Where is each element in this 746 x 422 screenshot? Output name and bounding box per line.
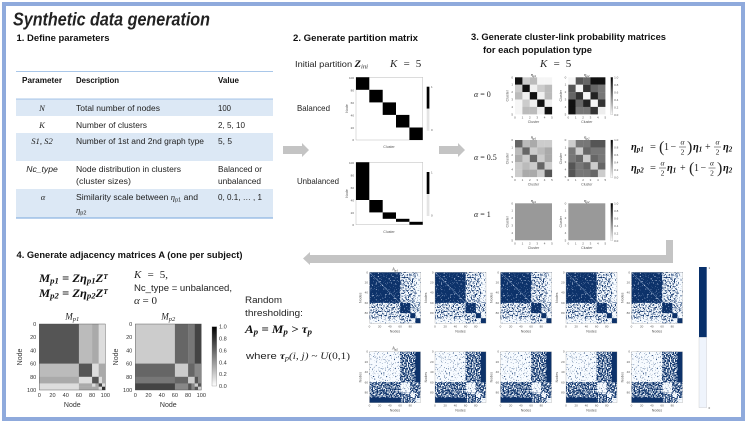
heatmap: M p2: 80: [126, 375, 132, 381]
colorbar: balanced: 0: [431, 128, 433, 132]
parameter table: Value: [218, 75, 239, 85]
equations: eta mixing: η: [667, 163, 673, 174]
text: random thresholding: thresholding:: [245, 308, 303, 319]
parameter table: Description: [76, 75, 119, 85]
colorbar: M matrices: 0.8: [219, 337, 227, 343]
text: random thresholding: p: [284, 354, 290, 362]
matrix: balanced: Node: [345, 104, 349, 113]
colorbar: M matrices: 0.2: [219, 372, 227, 378]
parameter table: Total number of nodes: [76, 103, 160, 113]
matrix: A p1 subject 4: [555, 270, 617, 333]
parameter table: and: [181, 192, 198, 202]
equations: M matrices: p2: [49, 292, 59, 300]
equations: eta mixing: p1: [636, 146, 644, 154]
matrix: eta p2, alpha 0: p2: [585, 74, 590, 78]
heatmap: M p2: [113, 312, 206, 409]
matrix: balanced: 20: [351, 126, 354, 130]
matrix: unbalanced: [345, 161, 423, 234]
matrix: unbalanced: Cluster: [383, 230, 395, 234]
equations: eta mixing: α: [681, 138, 686, 146]
equations: eta mixing: 2: [661, 168, 665, 178]
colorbar: adjacency: 1: [708, 266, 710, 270]
equations: eta mixing: 1: [694, 163, 699, 174]
equations: M matrices: = Zη: [59, 273, 87, 285]
heatmap: M p2: Node: [160, 402, 177, 409]
matrix: A p2 subject 4: Nodes: [555, 372, 559, 382]
text: random thresholding: Random: [245, 295, 282, 306]
label: alpha 0.5: α = 0.5: [474, 153, 497, 162]
matrix: balanced: 40: [351, 114, 354, 118]
panel: partition matrix: [293, 33, 433, 234]
equations: eta mixing: 1: [673, 166, 676, 174]
matrix: A p1 subject 3: Nodes: [490, 292, 494, 303]
matrix: unbalanced: Node: [345, 189, 349, 198]
heatmap: M p1: Node: [64, 402, 81, 409]
matrix: A p2 subject 3: Nodes: [490, 372, 494, 382]
equations: eta mixing: =: [650, 163, 656, 174]
heatmap: M p1: 60: [30, 362, 36, 368]
panel: define parameters: [16, 33, 273, 218]
matrix: A p2 subject 3: Nodes: [521, 409, 531, 413]
heading: step 3: for each population type: [483, 45, 592, 56]
parameter table: Similarity scale between η: [76, 192, 175, 202]
heatmap: M p2: 0: [129, 322, 132, 328]
matrix: A p1 subject 2: [424, 270, 486, 333]
parameter table: 0, 0.1, … , 1: [218, 192, 262, 202]
matrix: unbalanced: 40: [351, 198, 354, 202]
colorbar: adjacency: [699, 266, 710, 410]
heatmap: M p1: M: [65, 312, 73, 322]
heatmap: M p1: [17, 312, 110, 409]
equations: eta mixing: 2: [710, 168, 714, 178]
matrix: A p1 subject 2: Nodes: [424, 292, 428, 303]
heading: step 1: 1. Define parameters: [16, 33, 110, 44]
parameter table: p2: [80, 210, 86, 216]
matrix: unbalanced: 80: [351, 174, 354, 178]
text: random thresholding: (0,1): [328, 351, 350, 362]
colorbar: balanced: 1: [431, 85, 433, 89]
heatmap: M p1: 0: [38, 393, 41, 399]
equations: eta mixing: η: [723, 142, 729, 153]
heatmap: M p1: 80: [30, 375, 36, 381]
colorbar: alpha 0.5: [611, 138, 619, 180]
heatmap: M p1: 40: [30, 348, 36, 354]
heatmap: M p2: Node: [113, 349, 120, 365]
equations: eta mixing: =: [650, 142, 656, 153]
matrix: A p1 subject 4: Nodes: [555, 292, 559, 303]
panel: cluster-link probability matrices: [471, 32, 733, 250]
equations: M matrices: p1: [86, 276, 96, 286]
equations: eta mixing: α: [710, 158, 715, 168]
parameters text: Nc_type = unbalanced,: [134, 283, 232, 294]
matrix: A p2 subject 1: p2: [394, 348, 398, 352]
equations: eta mixing: 2: [728, 166, 733, 174]
parameters text: α = 0: [134, 295, 157, 307]
equations: eta mixing: (: [689, 160, 694, 177]
matrix: balanced: Cluster: [383, 145, 395, 149]
heatmap: M p2: 40: [159, 393, 165, 399]
parameter table: [16, 72, 273, 218]
heatmap: M p2: 100: [197, 393, 206, 399]
heatmap: M p2: 40: [126, 348, 132, 354]
parameter table: Node distribution in clusters: [76, 164, 181, 174]
equations: eta mixing: (: [659, 139, 664, 156]
parameter table: Parameter: [22, 75, 63, 85]
equations: eta mixing: η: [631, 142, 637, 153]
equations: M matrices: p2: [86, 292, 96, 300]
matrix: eta p2, alpha 0.5: η: [584, 134, 586, 140]
equations: eta mixing: +: [705, 142, 711, 153]
matrix: eta p1, alpha 0: [506, 72, 553, 124]
matrix: A p1 subject 1: Nodes: [358, 292, 362, 303]
colorbar: M matrices: 0.0: [219, 384, 227, 390]
matrix: eta p2, alpha 0.5: [559, 134, 606, 186]
parameter table: Number of 1st and 2nd graph type: [76, 136, 204, 146]
matrix: A p1 subject 1: p1: [394, 268, 398, 272]
equations: M matrices: = Zη: [59, 288, 87, 300]
label: K equals 5: K = 5: [539, 58, 572, 70]
heatmap: M p2: 60: [172, 393, 178, 399]
colorbar: unbalanced: 0: [431, 214, 433, 218]
matrix: A p2 subject 1: Nodes: [358, 372, 362, 382]
label: unbalanced: Unbalanced: [297, 177, 339, 186]
equations: eta mixing: p2: [636, 166, 644, 174]
parameter table: (cluster sizes): [76, 176, 131, 186]
parameter table: α: [41, 192, 46, 202]
matrix: A p1 subject 2: Nodes: [455, 329, 466, 333]
matrix: eta p1, alpha 1: η: [531, 198, 533, 203]
colorbar: M matrices: 1.0: [219, 325, 227, 331]
equations: eta mixing: −: [670, 142, 676, 153]
matrix: A p2 subject 3: [490, 350, 552, 413]
matrix: A p2 subject 1: Nodes: [390, 409, 400, 413]
equations: eta mixing: [631, 138, 733, 178]
equations: M matrices: Z: [95, 273, 103, 285]
matrix: balanced: [345, 76, 423, 149]
equations: eta mixing: 1: [664, 142, 669, 153]
matrix: A p2 subject 2: Nodes: [424, 372, 428, 382]
heatmap: M p2: 20: [145, 393, 152, 399]
arrow: step 3 to 4: [303, 240, 673, 265]
equations: eta mixing: +: [680, 163, 686, 174]
matrix: A p1 subject 5: Nodes: [652, 329, 662, 333]
matrix: A p2 subject 2: [424, 350, 486, 413]
label: initial partition: ini: [361, 64, 368, 70]
parameter table: 5, 5: [218, 136, 232, 146]
matrix: eta p2, alpha 1: p2: [585, 200, 590, 204]
matrix: eta p2, alpha 0.5: p2: [585, 136, 590, 140]
text: random thresholding: (i, j) ~ U: [289, 351, 330, 362]
matrix: unbalanced: 0: [352, 223, 354, 227]
colorbar: balanced: [427, 85, 433, 132]
parameter table: 100: [218, 103, 231, 113]
matrix: balanced: 0: [352, 138, 354, 142]
heatmap: M p1: 20: [30, 335, 36, 341]
matrix: eta p1, alpha 0: η: [531, 72, 533, 77]
parameters text: K = 5,: [133, 269, 168, 281]
parameter table: 2, 5, 10: [218, 120, 245, 130]
equations: eta mixing: 2: [716, 148, 720, 156]
heatmap: M p1: 40: [63, 393, 69, 399]
matrix: A p1 subject 1: Nodes: [390, 329, 400, 333]
matrix: A p1 subject 5: Nodes: [620, 292, 624, 303]
heatmap: M p1: 100: [101, 393, 110, 399]
equations: M matrices: M: [39, 273, 49, 285]
colorbar: M matrices: 0.6: [219, 348, 227, 354]
equations: eta mixing: α: [661, 158, 666, 168]
matrix: A p2 subject 1: A: [392, 346, 395, 351]
adjacency matrices: population 2: [358, 346, 682, 413]
parameter table: p1: [175, 198, 181, 204]
matrix: unbalanced: 60: [351, 186, 354, 190]
label: alpha 0: α = 0: [474, 90, 491, 99]
parameter table: Balanced or: [218, 164, 262, 174]
matrix: eta p1, alpha 1: [506, 198, 553, 250]
matrix: A p2 subject 5: Nodes: [620, 372, 624, 382]
equations: M matrices: Z: [95, 288, 103, 300]
equations: M matrices: T: [103, 273, 109, 281]
equations: eta mixing: η: [693, 142, 699, 153]
equations: eta mixing: 2: [728, 146, 733, 154]
heatmap: M p1: 60: [76, 393, 82, 399]
colorbar: alpha 0: [611, 75, 619, 117]
text: random thresholding: A: [245, 324, 253, 336]
equations: eta mixing: η: [631, 163, 637, 174]
matrix: A p1 subject 5: [620, 270, 682, 333]
matrix: eta p2, alpha 0: η: [584, 72, 586, 77]
matrix: unbalanced: 100: [349, 161, 354, 165]
heatmap: M p1: 100: [27, 388, 36, 394]
equations: M matrices: T: [103, 288, 109, 296]
matrix: unbalanced: 20: [351, 211, 354, 215]
colorbar: unbalanced: 1: [431, 170, 433, 174]
matrix: A p2 subject 5: [620, 350, 682, 413]
equations: eta mixing: η: [723, 163, 729, 174]
label: K equals 5: K = 5: [389, 58, 422, 70]
colorbar: M matrices: 0.4: [219, 360, 227, 366]
text: random thresholding: p: [282, 328, 288, 336]
matrix: A p1 subject 1: [358, 266, 420, 333]
colorbar: M matrices: [212, 325, 227, 390]
heatmap: M p1: p1: [72, 316, 79, 323]
arrow: step 1 to 2: [283, 143, 309, 157]
heatmap: M p1: 80: [89, 393, 95, 399]
heatmap: M p2: 60: [126, 362, 132, 368]
parameter table: K: [38, 120, 46, 130]
matrix: A p1 subject 3: [490, 270, 552, 333]
heading: step 3: 3. Generate cluster-link probability matrices: [471, 32, 666, 43]
parameter table: N: [38, 103, 46, 113]
matrix: eta p2, alpha 1: η: [584, 198, 586, 203]
matrix: eta p1, alpha 0.5: p1: [532, 136, 537, 140]
parameter table: η: [76, 205, 80, 215]
text: random thresholding: = M: [258, 324, 284, 336]
equations: M matrices: M: [39, 288, 49, 300]
text: random thresholding: p: [252, 328, 258, 336]
heatmap: M p2: 20: [126, 335, 132, 341]
equations: eta mixing: α: [716, 138, 721, 146]
heatmap: M p1: 20: [49, 393, 56, 399]
heading: step 2: 2. Generate partition matrix: [293, 33, 419, 44]
label: initial partition: Initial partition Z: [295, 59, 360, 70]
matrix: balanced: 80: [351, 88, 354, 92]
matrix: eta p2, alpha 0: [559, 72, 606, 124]
parameter table: Number of clusters: [76, 120, 147, 130]
text: random thresholding: where τ: [246, 351, 284, 362]
matrix: A p2 subject 4: [555, 350, 617, 413]
matrix: A p2 subject 4: Nodes: [586, 409, 597, 413]
matrix: A p1 subject 4: Nodes: [586, 329, 597, 333]
matrix: balanced: 60: [351, 101, 354, 105]
colorbar: unbalanced: [427, 170, 433, 218]
parameters text: [133, 269, 232, 307]
matrix: eta p1, alpha 1: p1: [532, 200, 537, 204]
arrow: step 2 to 3: [439, 143, 465, 157]
equations: eta mixing: ): [717, 160, 722, 177]
text: random thresholding: > τ: [288, 324, 308, 336]
matrix: A p2 subject 2: Nodes: [455, 409, 466, 413]
matrix: A p2 subject 5: Nodes: [652, 409, 662, 413]
matrix: A p1 subject 1: A: [392, 266, 395, 271]
heatmap: M p2: 80: [185, 393, 191, 399]
matrix: balanced: 100: [349, 76, 354, 80]
parameter table: Nc_type: [26, 164, 58, 174]
equations: eta mixing: 1: [699, 146, 702, 154]
heatmap: M p2: 100: [123, 388, 132, 394]
heading: step 4: 4. Generate adjacency matrices A (one per subject): [16, 250, 242, 261]
colorbar: adjacency: 0: [708, 406, 710, 410]
matrix: eta p1, alpha 0.5: η: [531, 134, 533, 140]
equations: M matrices: p1: [49, 276, 59, 286]
heatmap: M p1: Node: [17, 349, 24, 365]
matrix: eta p1, alpha 0: p1: [532, 74, 537, 78]
colorbar: alpha 1: [611, 201, 619, 243]
parameter table: S1, S2: [31, 136, 53, 146]
matrix: eta p2, alpha 1: [559, 198, 606, 250]
equations: M matrices: [38, 273, 109, 300]
equations: eta mixing: −: [700, 163, 706, 174]
heatmap: M p2: 0: [134, 393, 137, 399]
parameter table: unbalanced: [218, 176, 261, 186]
matrix: A p2 subject 1: [358, 346, 420, 413]
text: random thresholding: p: [306, 328, 312, 336]
label: alpha 1: α = 1: [474, 210, 491, 219]
matrix: A p1 subject 3: Nodes: [521, 329, 531, 333]
matrix: eta p1, alpha 0.5: [506, 134, 553, 186]
equations: eta mixing: ): [687, 139, 692, 156]
title: Synthetic data generation: [13, 8, 210, 30]
text: random thresholding: [244, 295, 350, 362]
panel: adjacency matrices: [16, 250, 710, 413]
heatmap: M p1: 0: [33, 322, 36, 328]
equations: eta mixing: 2: [681, 148, 685, 156]
heatmap: M p2: p2: [168, 316, 176, 323]
heatmap: M p2: M: [161, 312, 169, 322]
adjacency matrices: population 1: [358, 266, 682, 333]
heading: step 3: [471, 32, 666, 56]
label: balanced: Balanced: [297, 104, 330, 113]
